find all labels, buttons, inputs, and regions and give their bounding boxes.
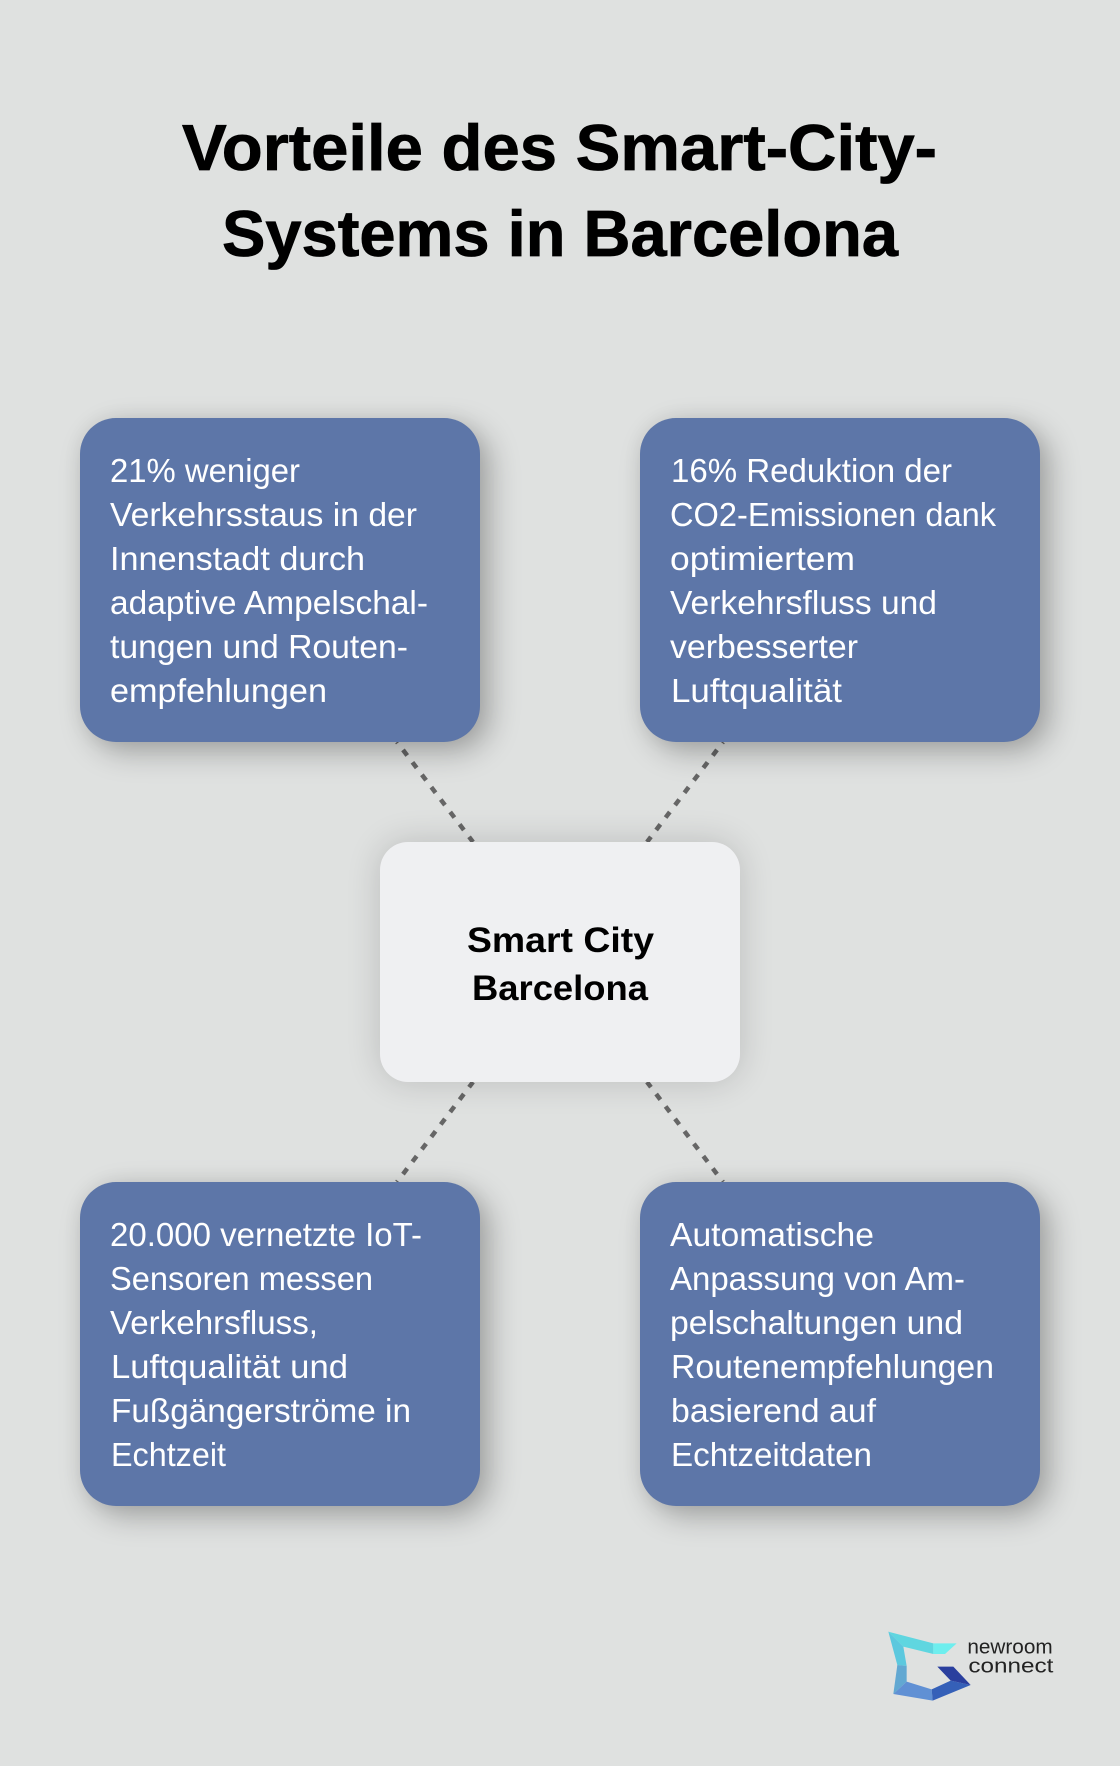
panel: CO2 reduction: Luftqualität bbox=[671, 673, 843, 710]
panel: IoT sensors: Sensoren messen bbox=[110, 1261, 373, 1298]
panel: CO2 reduction: Verkehrsfluss und bbox=[670, 585, 937, 622]
panel: traffic jam reduction: Innenstadt durch bbox=[110, 541, 365, 578]
panel: traffic jam reduction bbox=[80, 418, 480, 742]
logo: newroom connect: newroom bbox=[967, 1636, 1053, 1658]
panel: CO2 reduction: verbesserter bbox=[670, 629, 858, 666]
panel: automatic adjustment: Echtzeitdaten bbox=[671, 1437, 872, 1474]
panel: automatic adjustment: Routenempfehlungen bbox=[671, 1349, 994, 1386]
panel: IoT sensors: Fußgängerströme in bbox=[111, 1393, 411, 1430]
panel: traffic jam reduction: adaptive Ampelschal- bbox=[110, 585, 428, 622]
panel: automatic adjustment: Automatische bbox=[670, 1217, 874, 1254]
panel: IoT sensors: Luftqualität und bbox=[111, 1349, 348, 1386]
logo: newroom connect bbox=[888, 1632, 1054, 1701]
panel: CO2 reduction: 16% Reduktion der bbox=[671, 453, 952, 490]
panel: automatic adjustment bbox=[640, 1182, 1040, 1506]
panel: IoT sensors: Verkehrsfluss, bbox=[110, 1305, 318, 1342]
panel: IoT sensors bbox=[80, 1182, 480, 1506]
panel: IoT sensors: Echtzeit bbox=[111, 1437, 227, 1474]
panel: automatic adjustment: pelschaltungen und bbox=[670, 1305, 963, 1342]
panel: automatic adjustment: basierend auf bbox=[671, 1393, 877, 1430]
panel: centre node bbox=[380, 842, 740, 1082]
logo: newroom connect: connect bbox=[968, 1655, 1054, 1678]
dashed connectors bbox=[395, 742, 725, 1182]
panel: centre node: Barcelona bbox=[472, 969, 649, 1008]
title bbox=[182, 111, 937, 270]
panel: CO2 reduction: optimiertem bbox=[670, 541, 855, 578]
panel: CO2 reduction bbox=[640, 418, 1040, 742]
panel: CO2 reduction: CO2-Emissionen dank bbox=[670, 497, 996, 534]
panel: automatic adjustment: Anpassung von Am- bbox=[670, 1261, 965, 1298]
panel: traffic jam reduction: tungen und Routen- bbox=[110, 629, 408, 666]
panel: traffic jam reduction: 21% weniger bbox=[110, 453, 300, 490]
title: Vorteile des Smart-City- bbox=[182, 111, 937, 184]
panel: traffic jam reduction: empfehlungen bbox=[110, 673, 327, 710]
panel: traffic jam reduction: Verkehrsstaus in der bbox=[110, 497, 417, 534]
panel: centre node: Smart City bbox=[467, 921, 655, 960]
title: Systems in Barcelona bbox=[222, 197, 899, 270]
panel: IoT sensors: 20.000 vernetzte IoT- bbox=[110, 1217, 422, 1254]
